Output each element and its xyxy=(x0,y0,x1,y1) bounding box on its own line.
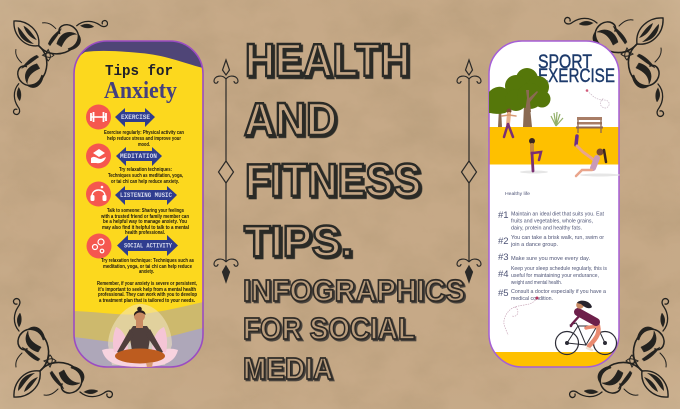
tip 1: #1 xyxy=(498,210,509,221)
tip 2: join a dance group. xyxy=(510,242,558,248)
tip 2 xyxy=(498,235,604,248)
text: meditation: or tai chi can help reduce anxiety. xyxy=(111,179,179,185)
tip 2: You can take a brisk walk, run, swim or xyxy=(511,235,604,241)
heading: Sport Exercise: EXERCISE xyxy=(538,66,615,87)
text: exercise: mood. xyxy=(138,142,150,148)
arrow label: social activity xyxy=(117,235,178,256)
tip 1 xyxy=(498,210,604,232)
tip 4: weight and mental health. xyxy=(510,280,562,286)
arrow label: listening music xyxy=(115,186,177,205)
panel: sport exercise xyxy=(489,41,620,367)
corner ornament: top right xyxy=(565,18,663,116)
arrow label: exercise: EXERCISE xyxy=(121,114,150,121)
icon: meditation hand xyxy=(86,144,111,168)
text: exercise: help reduce stress and improve your xyxy=(107,136,181,142)
arrow label: meditation xyxy=(116,147,162,166)
subtitle: Infographics for social media: FOR SOCIAL xyxy=(243,311,415,346)
text: listening music xyxy=(100,208,189,236)
left vertical flourish xyxy=(214,60,238,282)
text: Healthy life: Healthy life xyxy=(505,191,530,196)
arrow label: exercise xyxy=(115,108,155,127)
tip 4: Keep your sleep schedule regularly, this is xyxy=(511,266,607,272)
panel background and waves xyxy=(74,41,203,367)
tip 5: Consult a doctor especially if you have a xyxy=(511,289,606,295)
text: exercise xyxy=(104,130,184,148)
title: Health and Fitness Tips. xyxy=(244,34,421,266)
panel background and yellow bands xyxy=(489,41,619,367)
text: social activity: meditation, yoga, or tai chi can help reduce xyxy=(103,264,192,270)
tip 1: dairy, protein and healthy fats. xyxy=(511,226,582,232)
title: Health and Fitness Tips.: AND xyxy=(244,93,337,145)
corner ornament: top left xyxy=(14,21,108,115)
tip 3: Make sure you move every day. xyxy=(511,256,590,262)
title: Health and Fitness Tips.: TIPS. xyxy=(244,217,353,266)
icon: headphones xyxy=(86,182,111,206)
tip 3 xyxy=(498,252,590,263)
illustration: woman kicking leg up xyxy=(576,136,620,176)
text: closing reminder: Remember, if your anxiety is severe or persistent, xyxy=(97,281,197,287)
subtitle: Infographics for social media: INFOGRAPHICS xyxy=(243,273,465,308)
illustration: dashed flight trail top xyxy=(586,89,609,108)
panel border xyxy=(489,41,619,367)
heading: Tips for: Tips for xyxy=(105,63,173,80)
arrow label: social activity: SOCIAL ACTIVITY xyxy=(124,242,172,250)
text: social activity: Try relaxation technique: Techniques such as xyxy=(101,258,194,264)
text: listening music: health professional. xyxy=(125,230,165,236)
tip 4: #4 xyxy=(498,269,509,280)
text: listening music: with a trusted friend or family member can xyxy=(100,214,189,220)
illustration: bench xyxy=(576,117,603,133)
heading: Sport Exercise xyxy=(538,52,615,87)
heading: Sport Exercise: SPORT xyxy=(538,52,592,73)
tip 1: Maintain an ideal diet that suits you. Eat xyxy=(511,212,604,218)
text: closing reminder: professional. They can work with you to develop xyxy=(98,292,197,298)
illustration: woman standing on one leg xyxy=(520,138,548,174)
illustration: woman stretching arms xyxy=(502,108,516,137)
text: social activity: anxiety. xyxy=(139,269,154,275)
subtitle: Infographics for social media xyxy=(243,273,465,386)
tip 5: medical condition. xyxy=(511,296,553,302)
text: meditation: Techniques such as meditation, yoga, xyxy=(108,173,183,179)
tip 5: #5 xyxy=(498,288,509,299)
panel border xyxy=(74,41,203,367)
arrow label: meditation: MEDITATION xyxy=(120,153,157,160)
corner ornament: bottom left xyxy=(14,299,112,397)
heading: Anxiety: Anxiety xyxy=(104,78,177,104)
illustration: trees xyxy=(489,68,550,127)
title: Health and Fitness Tips.: FITNESS xyxy=(245,154,421,206)
tip 5 xyxy=(498,288,606,302)
text: exercise: Exercise regularly: Physical activity can xyxy=(104,130,184,136)
right vertical flourish xyxy=(457,60,481,282)
panel: tips for anxiety xyxy=(74,41,203,367)
icon: social network xyxy=(86,234,112,258)
text: listening music: be a helpful way to manage anxiety. You xyxy=(103,219,187,225)
tip 4: useful for maintaining your endurance, xyxy=(511,273,599,279)
text: listening music: may also find it helpful to talk to a mental xyxy=(102,225,189,231)
text: meditation: Try relaxation techniques: xyxy=(119,167,172,173)
text: closing reminder: a treatment plan that is tailored to your needs. xyxy=(99,298,195,304)
tip 3: #3 xyxy=(498,252,509,263)
arrow label: listening music: LISTENING MUSIC xyxy=(120,192,172,199)
text: closing reminder: it's important to seek help from a mental health xyxy=(98,287,196,293)
illustration: meditating woman on lotus xyxy=(102,304,178,367)
subtitle: Infographics for social media: MEDIA xyxy=(243,351,333,386)
title: Health and Fitness Tips.: HEALTH xyxy=(245,34,410,86)
illustration: dashed flight trail bottom xyxy=(504,296,538,335)
icon: dumbbell xyxy=(86,104,111,130)
tip 4 xyxy=(498,266,607,286)
corner ornament: bottom right xyxy=(570,299,668,397)
text: closing reminder xyxy=(97,281,197,304)
illustration: plant xyxy=(551,112,563,126)
text: meditation xyxy=(108,167,183,185)
text: listening music: Talk to someone: Sharing your feelings xyxy=(107,208,184,214)
tip 1: fruits and vegetables, whole grains, xyxy=(511,218,593,224)
text: social activity xyxy=(101,258,194,275)
tip 2: #2 xyxy=(498,236,509,247)
illustration: cyclist xyxy=(556,301,616,354)
